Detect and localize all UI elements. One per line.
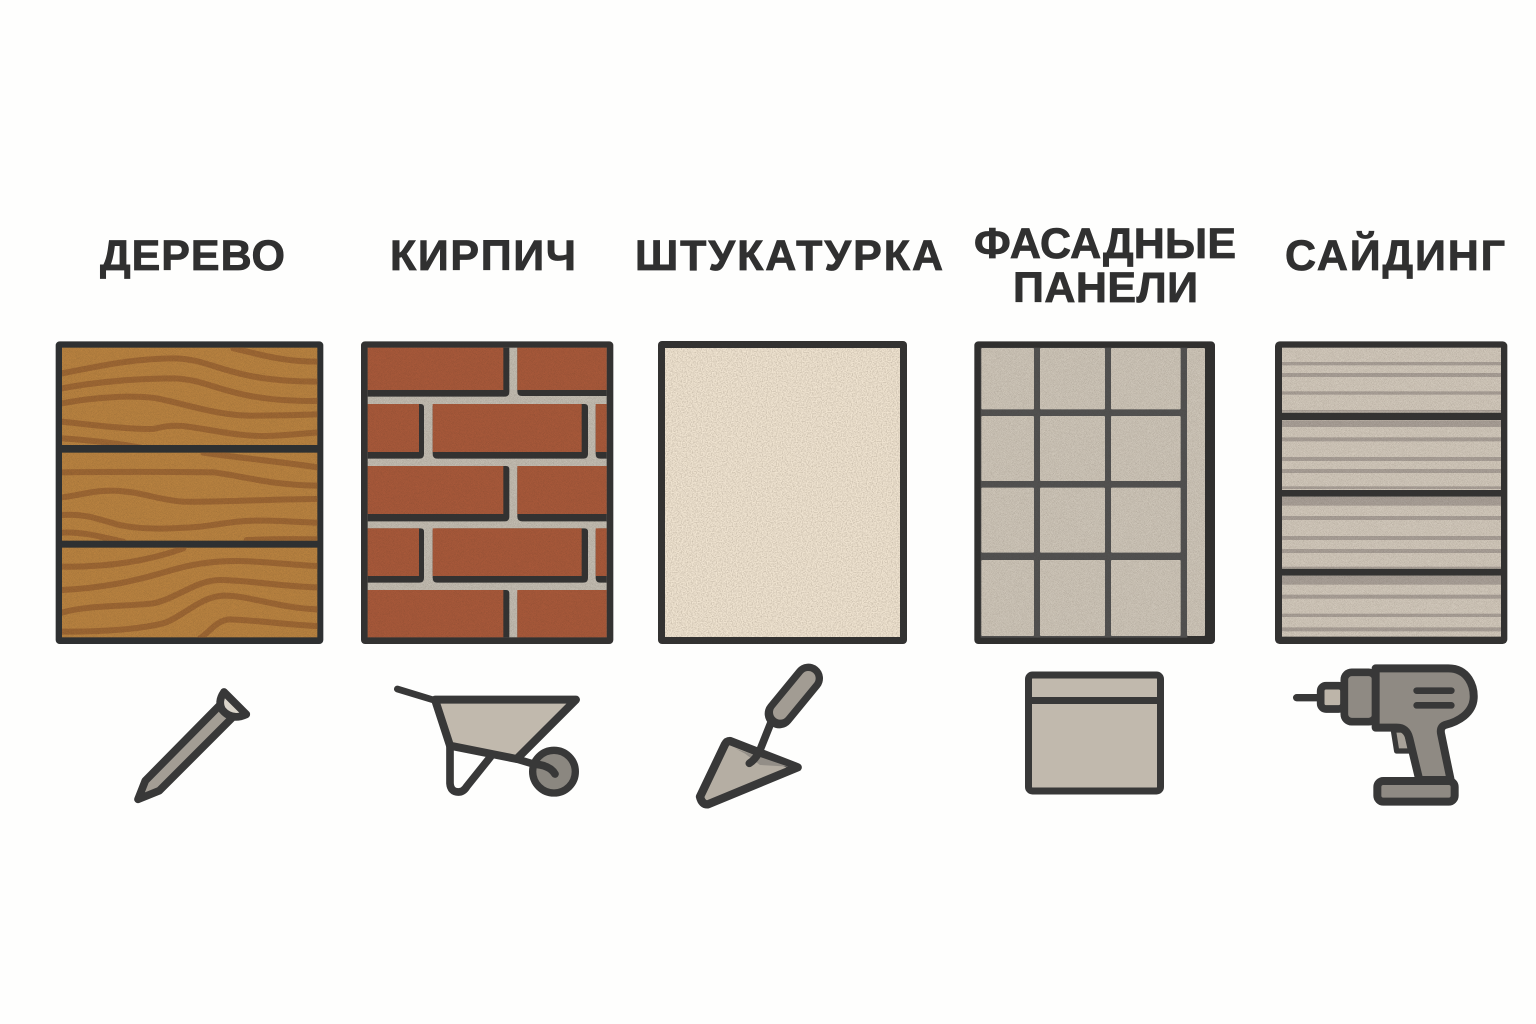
panel: brick wall [361, 341, 613, 644]
panel: plaster [658, 341, 907, 644]
panel: facade tiles [974, 341, 1215, 644]
icon: facade panel [1028, 675, 1161, 791]
heading: facade panels: ФАСАДНЫЕ [974, 220, 1236, 268]
heading: siding: САЙДИНГ [1285, 231, 1505, 280]
icon: drill [1297, 668, 1474, 802]
icon: nail [138, 692, 246, 799]
heading: brick: КИРПИЧ [390, 232, 576, 280]
panel: siding [1275, 341, 1507, 644]
heading: facade panels [974, 220, 1236, 312]
icon: trowel [700, 678, 808, 804]
heading: plaster: ШТУКАТУРКА [635, 232, 943, 280]
heading: wood: ДЕРЕВО [100, 232, 285, 280]
heading: facade panels: ПАНЕЛИ [1013, 264, 1198, 312]
panel: wood planks [56, 341, 323, 644]
icon: wheelbarrow [397, 689, 576, 793]
